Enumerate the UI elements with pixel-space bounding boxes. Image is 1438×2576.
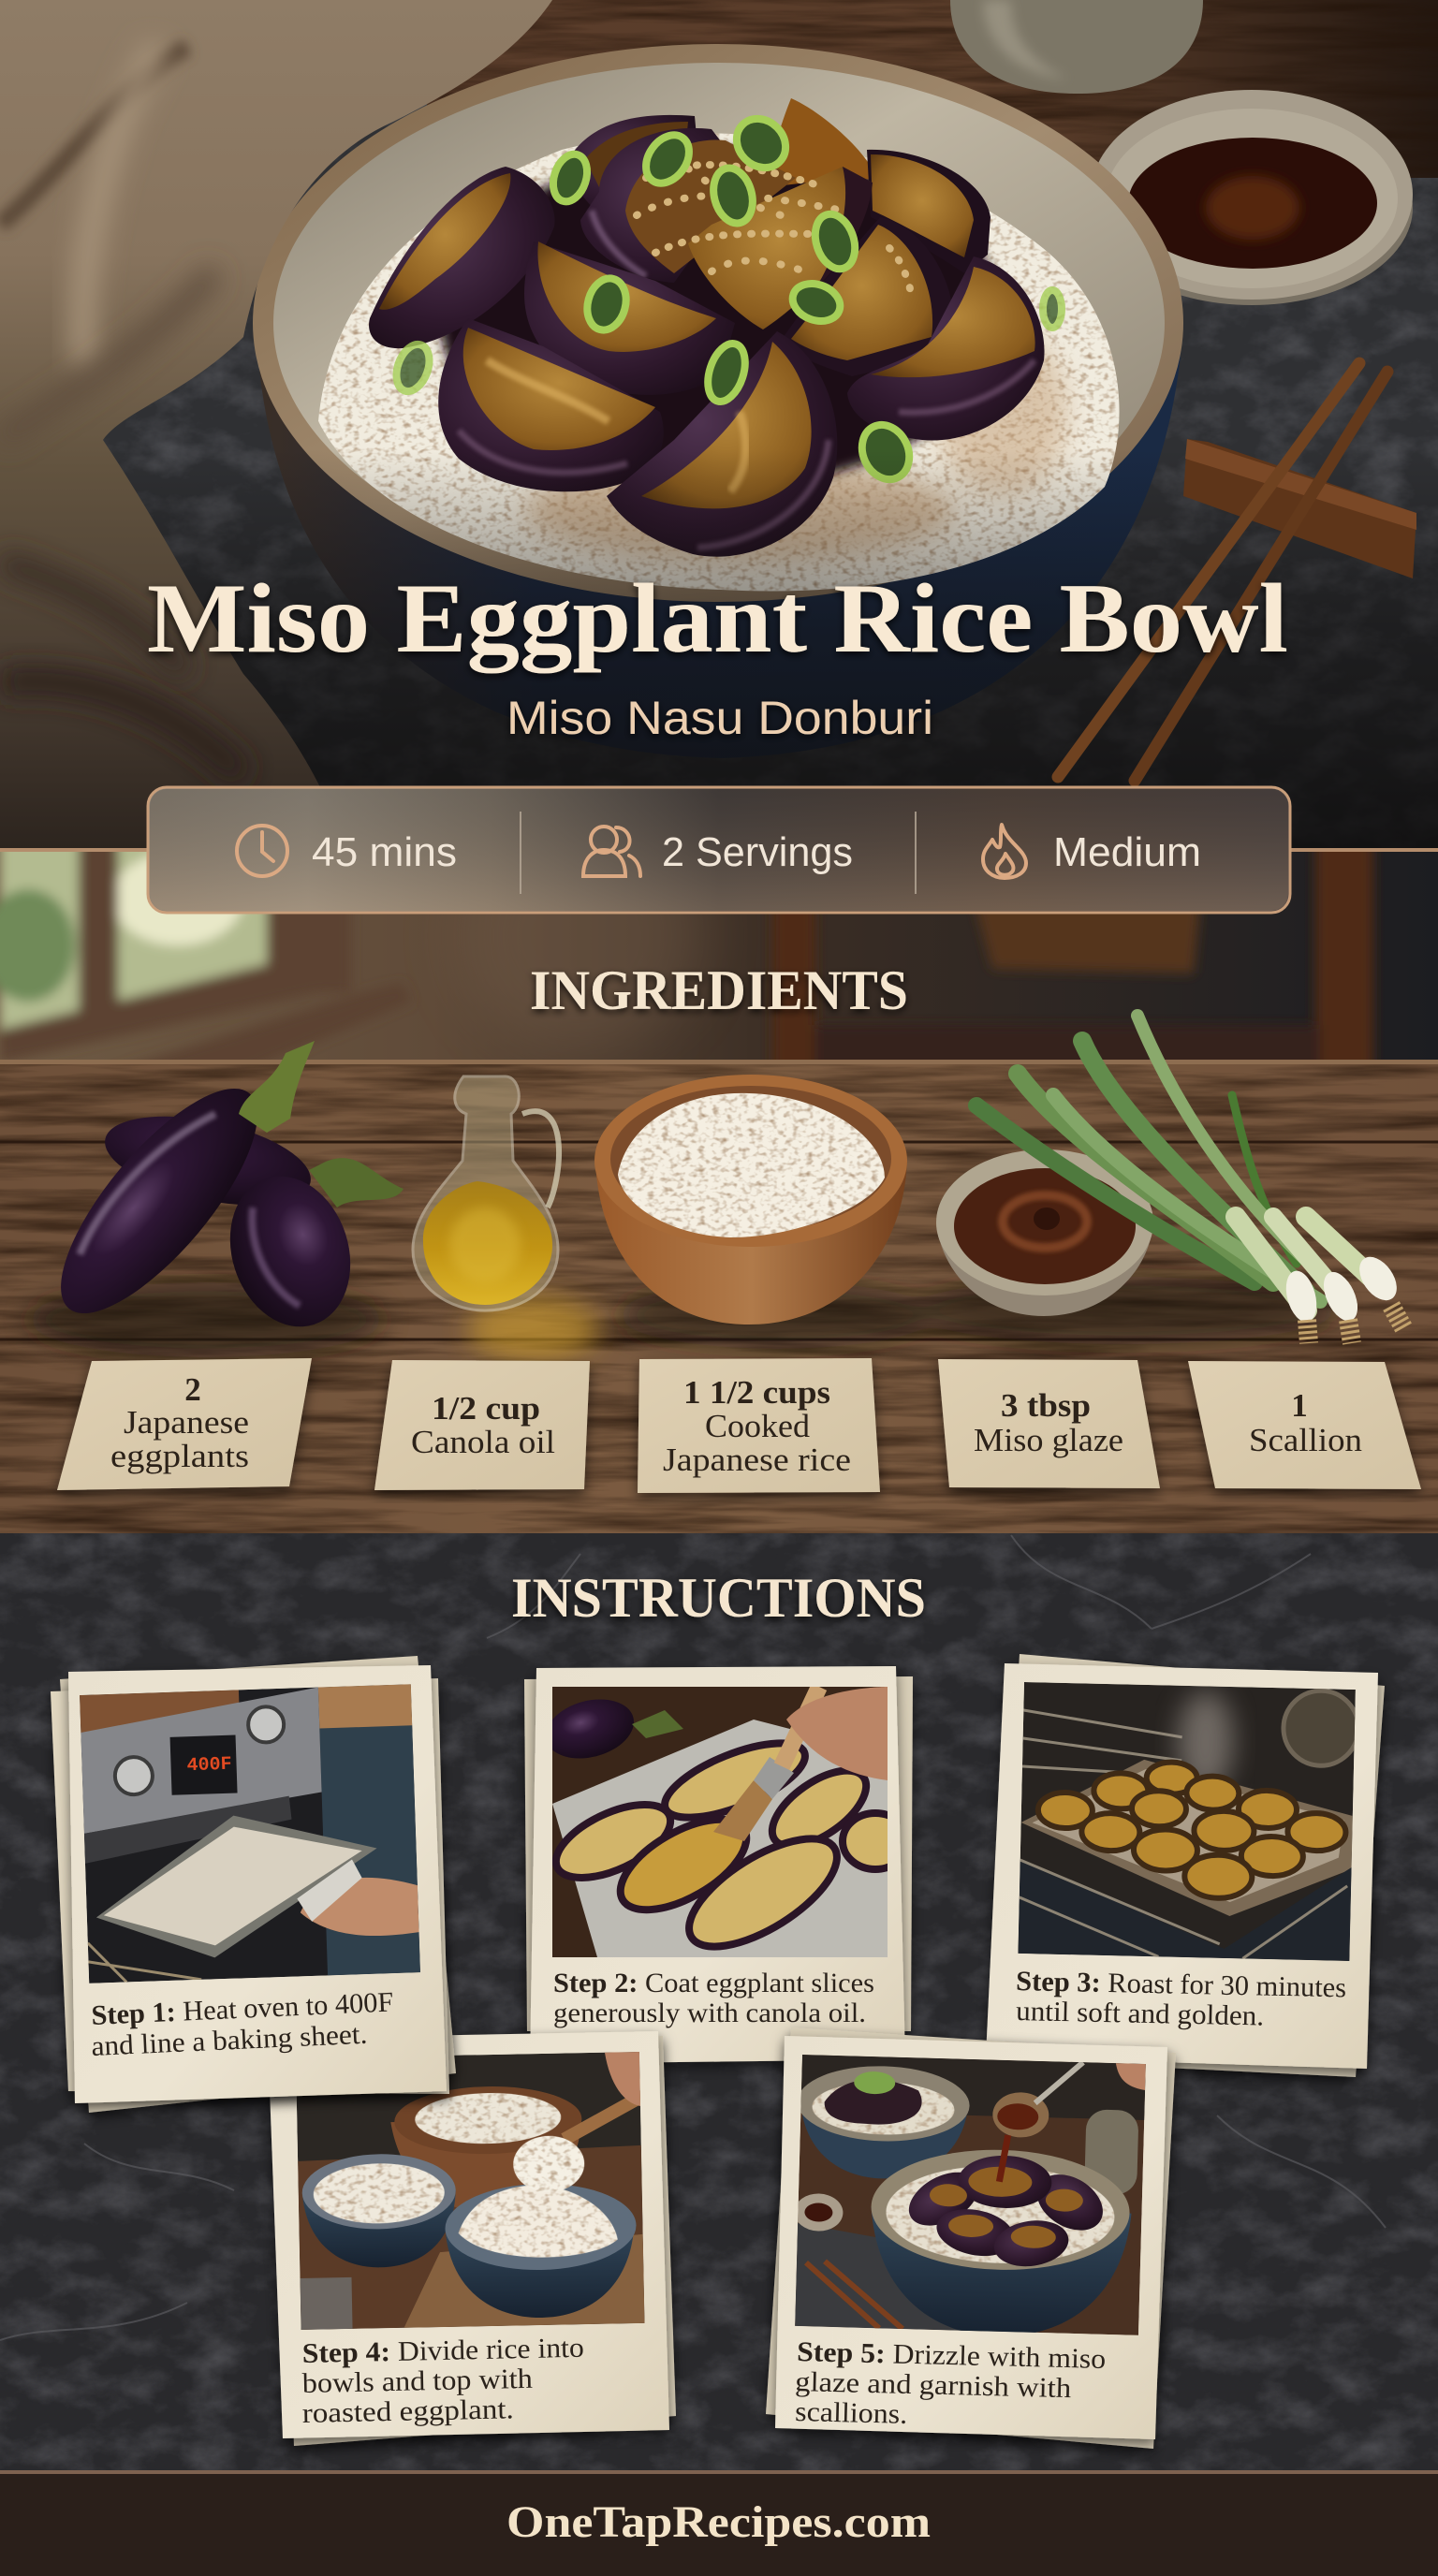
- panel: stats bar: [148, 787, 1290, 913]
- photo: dividing rice: [296, 2052, 647, 2330]
- photo: oven and tray: [80, 1684, 420, 1983]
- ingredient card: canola oil: 1/2 cup: [432, 1390, 540, 1427]
- card: step 3: until soft and golden.: [1016, 1996, 1264, 2032]
- card: step 1: [51, 1656, 456, 2113]
- stat: servings: 2 Servings: [662, 829, 853, 875]
- icon: sauce dish: [1091, 90, 1413, 305]
- caption: step 2: Step 2: Coat eggplant slices: [553, 1968, 874, 1998]
- ingredient card: miso glaze: Miso glaze: [974, 1422, 1123, 1458]
- oven display: 400F: [186, 1754, 232, 1777]
- card: step 2: generously with canola oil.: [553, 1998, 866, 2028]
- photo: brushing eggplant: [539, 1687, 908, 1968]
- footer website text: OneTapRecipes.com: [506, 2497, 931, 2547]
- card: step 5: [766, 2027, 1176, 2449]
- scallion rings: [390, 109, 1062, 487]
- ingredient card: eggplants: [57, 1358, 312, 1490]
- title: Miso Eggplant Rice Bowl: [147, 564, 1288, 673]
- card: step 4: [268, 2031, 676, 2446]
- icon: clock: [237, 826, 287, 876]
- ingredient card: rice: Cooked: [705, 1408, 811, 1444]
- icon: flame: [983, 825, 1026, 878]
- dark vignette behind title: [0, 449, 1438, 850]
- stat: difficulty: Medium: [1053, 829, 1201, 875]
- ingredient card: eggplants: 2: [184, 1371, 201, 1408]
- icon: people: [583, 827, 640, 876]
- ingredient card: rice: [638, 1358, 880, 1493]
- ingredient card: rice: 1 1/2 cups: [683, 1374, 830, 1411]
- ingredient card: canola oil: Canola oil: [411, 1424, 555, 1460]
- card: step 5: glaze and garnish with: [795, 2366, 1072, 2404]
- caption: step 1: Step 1: Heat oven to 400F: [91, 1986, 394, 2031]
- card: step 4: bowls and top with: [301, 2364, 533, 2399]
- divider line beside stats: [0, 848, 1438, 852]
- icon: eggplants: [30, 1041, 404, 1342]
- heading: ingredients: INGREDIENTS: [530, 959, 908, 1021]
- ingredient card: scallion: [1188, 1361, 1421, 1489]
- card: step 5: scallions.: [795, 2396, 908, 2430]
- ingredient card: canola oil: [374, 1360, 590, 1490]
- panel: hero photo: [0, 0, 1438, 850]
- caption: step 5: Step 5: Drizzle with miso: [797, 2336, 1107, 2375]
- caption: step 3: Step 3: Roast for 30 minutes: [1016, 1966, 1346, 2003]
- photo: drizzling miso glaze: [791, 2055, 1146, 2340]
- icon: bowl of cooked rice: [594, 1075, 907, 1325]
- table shadows: [28, 1277, 1339, 1357]
- bowl outer body: [257, 346, 1181, 758]
- card: step 3: [986, 1654, 1385, 2077]
- icon: chopsticks: [1058, 363, 1387, 781]
- card: step 1: and line a baking sheet.: [91, 2019, 368, 2062]
- footer band: [0, 2470, 1438, 2576]
- blurred background scenery: [0, 824, 1373, 1076]
- stat: time: 45 mins: [312, 829, 457, 875]
- panel: window background: [0, 824, 1438, 1076]
- bowl rim: [253, 44, 1183, 602]
- ingredient card: scallion: Scallion: [1249, 1422, 1362, 1458]
- ingredient card: miso glaze: [938, 1359, 1160, 1488]
- icon: main rice bowl: [253, 44, 1183, 758]
- wooden table top behind bowl: [427, 0, 1438, 178]
- ingredient card: eggplants: Japanese: [124, 1404, 249, 1441]
- icon: scallions: [976, 1016, 1404, 1343]
- panel: ingredients table: [0, 1060, 1438, 1533]
- subtitle: Miso Nasu Donburi: [506, 692, 933, 744]
- ingredient card: rice: Japanese rice: [663, 1442, 851, 1478]
- linen cloth: [0, 0, 552, 850]
- ingredient card: miso glaze: 3 tbsp: [1001, 1387, 1091, 1424]
- heading: instructions: INSTRUCTIONS: [511, 1567, 926, 1629]
- icon: ceramic cup: [950, 0, 1203, 94]
- ingredient card: scallion: 1: [1291, 1387, 1308, 1424]
- card: step 2: [524, 1666, 913, 2064]
- caption: step 4: Step 4: Divide rice into: [301, 2333, 584, 2369]
- bowl inner glaze: [273, 63, 1165, 488]
- icon: miso glaze bowl: [936, 1149, 1153, 1316]
- icon: oil jug: [413, 1076, 559, 1310]
- ingredient card: eggplants: eggplants: [110, 1438, 249, 1474]
- card: step 4: roasted eggplant.: [301, 2393, 514, 2429]
- icon: chopstick rest: [1183, 439, 1416, 578]
- panel: instructions slate background: [0, 1533, 1438, 2471]
- rice: [318, 133, 1120, 592]
- sesame seeds: [637, 165, 913, 300]
- eggplant slices: [369, 98, 1045, 557]
- photo: roasting in the oven: [1018, 1682, 1359, 1961]
